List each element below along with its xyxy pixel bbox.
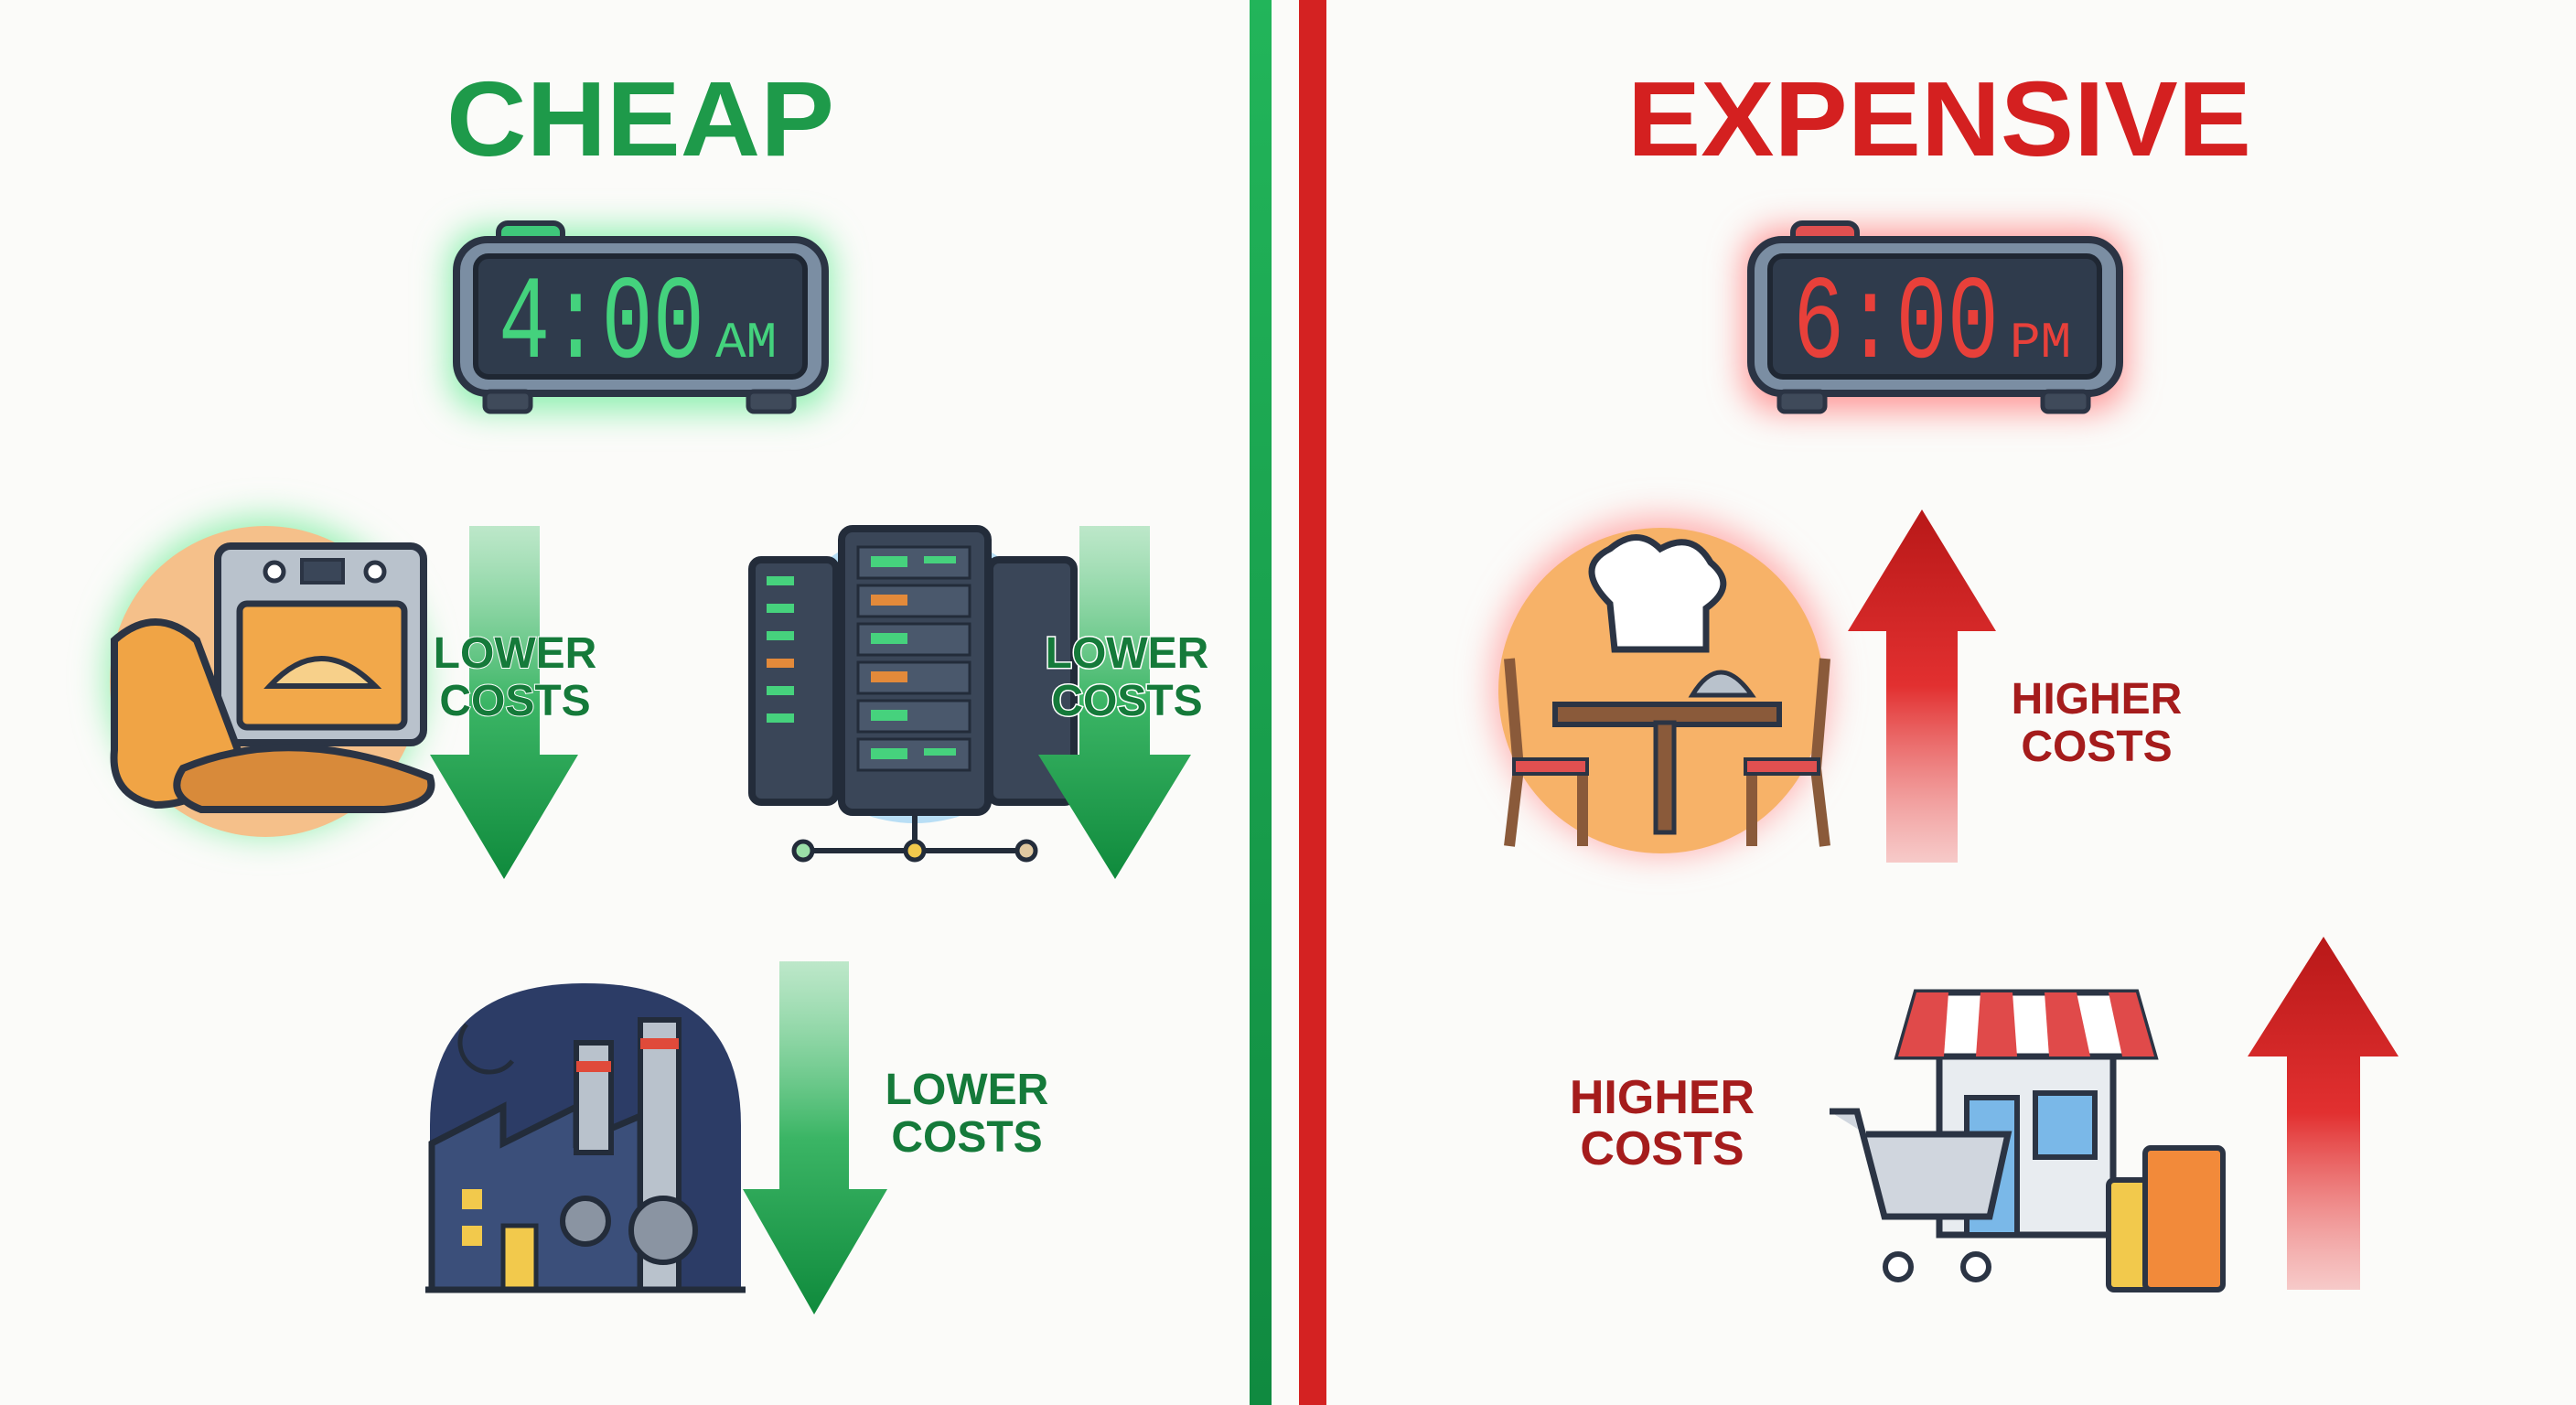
clock: 4:00 AM: AM [715, 314, 777, 372]
clock: 4:00 AM [448, 223, 832, 412]
icon: restaurant table [1492, 517, 1830, 855]
text: LOWER COSTS 3: LOWER [886, 1066, 1048, 1114]
icon: server racks [752, 529, 1074, 860]
text: HIGHER COSTS 2: HIGHER [1570, 1071, 1755, 1124]
text: LOWER COSTS 2: LOWER [1046, 629, 1208, 678]
text: LOWER COSTS 2: COSTS [1051, 677, 1203, 725]
divider: red line [1299, 0, 1326, 1405]
icon: night factory [425, 983, 746, 1290]
clock: 6:00 PM: 6:00 [1793, 259, 1999, 393]
clock: 4:00 AM: 4:00 [499, 259, 704, 393]
text: HIGHER COSTS 2: COSTS [1580, 1122, 1744, 1175]
clock: 6:00 PM: PM [2010, 314, 2071, 372]
arrow: lower costs 2 [1038, 526, 1208, 879]
text: LOWER COSTS 1: LOWER [434, 629, 596, 678]
text: LOWER COSTS 3: COSTS [891, 1113, 1043, 1162]
arrow: higher costs 2 [2248, 937, 2399, 1290]
text: HIGHER COSTS 1: COSTS [2021, 723, 2173, 771]
icon: store with cart [1830, 992, 2223, 1290]
text: LOWER COSTS 1: COSTS [439, 677, 591, 725]
clock: 6:00 PM [1743, 223, 2127, 412]
arrow: lower costs 3 [743, 961, 1048, 1314]
icon: oven and bread [105, 517, 431, 837]
arrow: lower costs 1 [430, 526, 596, 879]
arrow: higher costs 1 [1848, 509, 1996, 863]
title: CHEAP: CHEAP [446, 59, 834, 178]
text: HIGHER COSTS 1: HIGHER [2012, 675, 2182, 724]
title: EXPENSIVE: EXPENSIVE [1627, 59, 2251, 178]
divider: green line [1250, 0, 1272, 1405]
